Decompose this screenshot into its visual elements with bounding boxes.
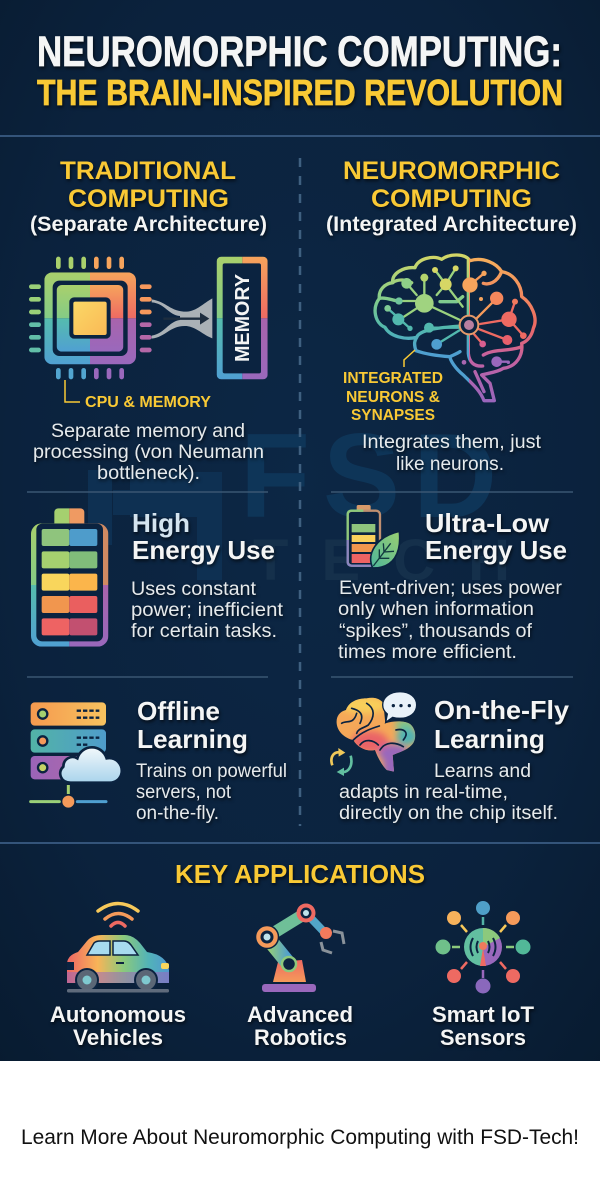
icon: CPU chip bbox=[31, 259, 149, 377]
icon: neural brain bbox=[375, 255, 535, 401]
text: offline learning: servers, not bbox=[136, 782, 232, 803]
heading: traditional computing: (Separate Architecture) bbox=[30, 213, 267, 236]
icon: full battery bbox=[31, 508, 108, 647]
text: high energy use: High bbox=[132, 508, 190, 538]
text: offline learning: on-the-fly. bbox=[136, 803, 219, 824]
heading: key applications: KEY APPLICATIONS bbox=[175, 859, 425, 889]
text: offline learning: Offline bbox=[137, 696, 220, 726]
text: ultra-low energy use bbox=[338, 508, 567, 663]
watermark: FSD Tech: TECH bbox=[253, 528, 510, 593]
icon: learning brain with speech bubble bbox=[331, 692, 420, 777]
text: on-the-fly learning: Learning bbox=[434, 724, 545, 754]
text: ultra-low energy use: Energy Use bbox=[425, 535, 567, 565]
labels: applications: Autonomous bbox=[50, 1002, 186, 1027]
heading: traditional computing bbox=[30, 157, 267, 236]
text: offline learning: Trains on powerful bbox=[136, 761, 287, 782]
text: on-the-fly learning: directly on the chip itself. bbox=[339, 803, 558, 824]
labels: applications: Vehicles bbox=[73, 1025, 163, 1050]
text: on-the-fly learning: Learns and bbox=[434, 761, 531, 782]
heading: neuromorphic computing: COMPUTING bbox=[371, 185, 532, 213]
text: high energy use: power; inefficient bbox=[131, 600, 284, 621]
text: high energy use: for certain tasks. bbox=[131, 621, 277, 642]
labels: applications bbox=[50, 1002, 535, 1050]
labels: applications: Advanced bbox=[247, 1002, 353, 1027]
text: on-the-fly learning: On-the-Fly bbox=[434, 695, 570, 725]
text: on-the-fly learning: adapts in real-time, bbox=[339, 782, 508, 803]
text: ultra-low energy use: Event-driven; uses power bbox=[339, 578, 563, 599]
label: integrated neurons and synapses bbox=[343, 350, 443, 424]
text: separate memory description bbox=[33, 421, 264, 484]
text: high energy use: Uses constant bbox=[131, 579, 257, 600]
icon: robot arm bbox=[256, 904, 344, 992]
label: CPU and memory bbox=[65, 380, 211, 411]
labels: applications: Robotics bbox=[254, 1025, 347, 1050]
text: separate memory description: Separate memory and bbox=[51, 421, 245, 442]
text: ultra-low energy use: only when information bbox=[338, 599, 534, 620]
watermark: FSD Tech: S bbox=[323, 409, 400, 543]
heading: traditional computing: COMPUTING bbox=[68, 185, 229, 213]
text: ultra-low energy use: times more efficient. bbox=[338, 642, 517, 663]
icon: battery with leaf bbox=[348, 505, 400, 568]
text: separate memory description: bottleneck). bbox=[97, 463, 200, 484]
labels: applications: Smart IoT bbox=[432, 1002, 535, 1027]
title bbox=[37, 28, 563, 113]
text: separate memory description: processing (von Neumann bbox=[33, 442, 264, 463]
text: ultra-low energy use: Ultra-Low bbox=[425, 508, 550, 538]
text: integrates description: Integrates them, just bbox=[362, 432, 542, 453]
heading: neuromorphic computing: (Integrated Architecture) bbox=[326, 213, 577, 236]
icon: memory module bbox=[217, 257, 268, 379]
footer call to action: Learn More About Neuromorphic Computing with FSD-Tech! bbox=[21, 1126, 579, 1149]
label: CPU and memory: CPU & MEMORY bbox=[85, 394, 211, 411]
text: high energy use bbox=[131, 508, 284, 642]
text: high energy use: Energy Use bbox=[132, 535, 275, 565]
watermark: FSD Tech: F bbox=[240, 409, 310, 543]
text: ultra-low energy use: “spikes”, thousands of bbox=[339, 621, 533, 642]
text: integrates description: like neurons. bbox=[396, 454, 504, 475]
icon: memory module: MEMORY bbox=[232, 273, 254, 362]
text: integrates description bbox=[362, 432, 542, 475]
heading: neuromorphic computing bbox=[326, 157, 577, 236]
label: integrated neurons and synapses: NEURONS & bbox=[346, 389, 440, 406]
labels: applications: Sensors bbox=[440, 1025, 526, 1050]
icon: IoT sensor network bbox=[436, 901, 530, 994]
icon: server with cloud bbox=[31, 702, 122, 808]
icon: connected car bbox=[67, 904, 169, 992]
label: integrated neurons and synapses: INTEGRATED bbox=[343, 370, 443, 387]
text: offline learning: Learning bbox=[137, 724, 248, 754]
heading: traditional computing: TRADITIONAL bbox=[60, 157, 236, 185]
text: offline learning bbox=[136, 696, 287, 824]
text: on-the-fly learning bbox=[339, 695, 570, 824]
arrow: bottleneck to memory bbox=[152, 298, 212, 339]
watermark: FSD Tech: D bbox=[413, 409, 497, 543]
watermark: FSD Tech bbox=[88, 409, 510, 593]
label: integrated neurons and synapses: SYNAPSES bbox=[351, 407, 435, 424]
heading: neuromorphic computing: NEUROMORPHIC bbox=[343, 157, 560, 185]
